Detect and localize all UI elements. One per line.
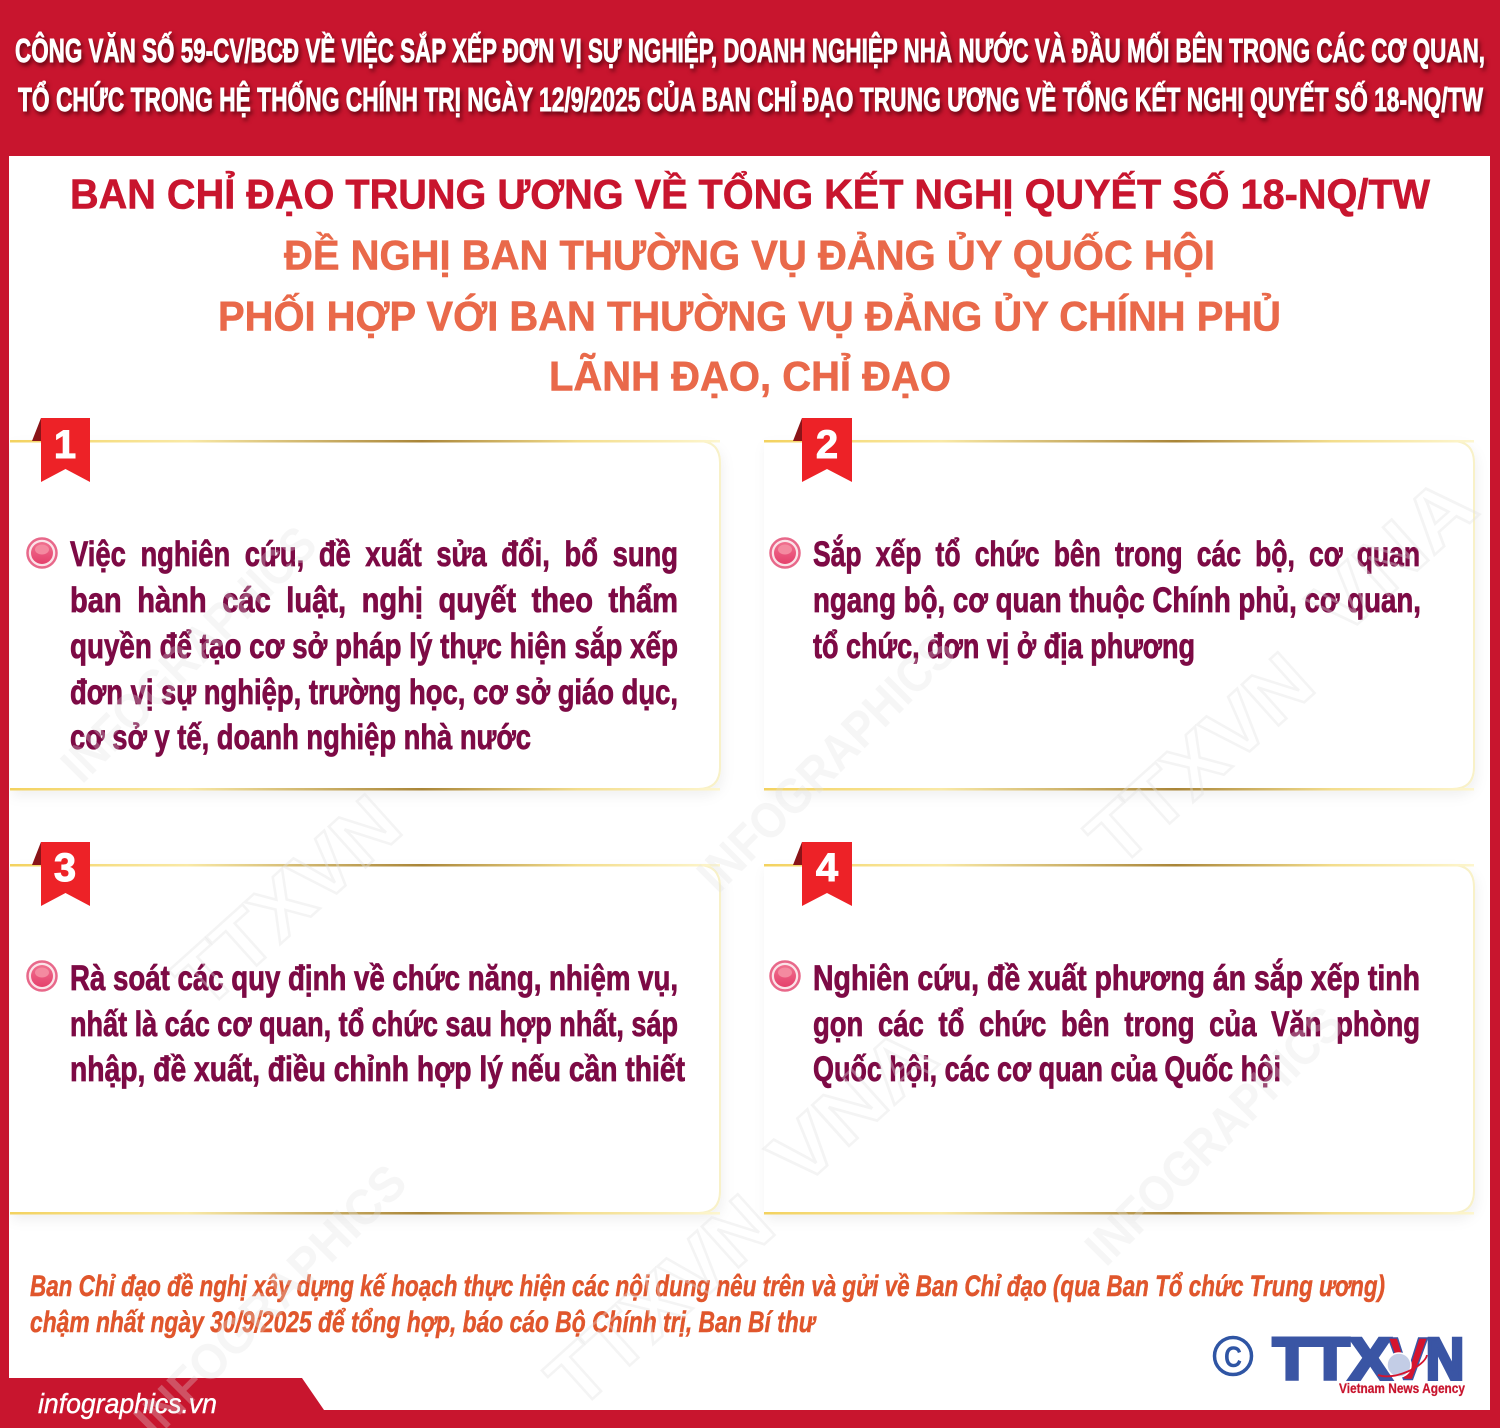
ribbon number 3: 3 bbox=[54, 846, 76, 890]
text block 3: Rà soát các quy định về chức năng, nhiệm vụ, bbox=[70, 959, 678, 998]
logo: TTXVN: TTX bbox=[1273, 1327, 1391, 1392]
watermark pattern: TTXVN bbox=[530, 1178, 790, 1425]
ribbon number 2 bbox=[793, 418, 852, 482]
watermark pattern: TTXVN bbox=[1070, 636, 1330, 883]
text block 1: cơ sở y tế, doanh nghiệp nhà nước bbox=[70, 718, 531, 757]
text block 1: ban hành các luật, nghị quyết theo thẩm bbox=[70, 581, 678, 620]
footer note: chậm nhất ngày 30/9/2025 để tổng hợp, báo cáo Bộ Chính trị, Ban Bí thư bbox=[30, 1306, 817, 1339]
header title bbox=[15, 31, 1485, 118]
main heading bbox=[70, 168, 1430, 400]
ribbon number 1 bbox=[32, 418, 90, 482]
text block 4 bbox=[813, 958, 1420, 1089]
panel 4 bbox=[764, 842, 1474, 1214]
main heading: BAN CHỈ ĐẠO TRUNG ƯƠNG VỀ TỔNG KẾT NGHỊ QUYẾT SỐ 18-NQ/TW bbox=[70, 168, 1430, 218]
panel 3 bbox=[10, 842, 720, 1214]
panel 2 bbox=[764, 418, 1474, 790]
copyright symbol: C bbox=[1224, 1341, 1242, 1374]
logo: TTXVN: N bbox=[1426, 1327, 1464, 1392]
watermark pattern: INFOGRAPHICS bbox=[1074, 996, 1354, 1276]
text block 1 bbox=[70, 535, 678, 757]
watermark pattern: VNA bbox=[1292, 459, 1493, 653]
text block 1: Việc nghiên cứu, đề xuất sửa đổi, bổ sung bbox=[70, 535, 678, 574]
text block 2: tổ chức, đơn vị ở địa phương bbox=[813, 627, 1195, 666]
site label: infographics.vn bbox=[38, 1388, 217, 1419]
main heading: ĐỀ NGHỊ BAN THƯỜNG VỤ ĐẢNG ỦY QUỐC HỘI bbox=[284, 230, 1215, 278]
text block 1: quyền để tạo cơ sở pháp lý thực hiện sắp xếp bbox=[70, 626, 678, 666]
ribbon number 4 bbox=[793, 842, 852, 906]
watermark pattern bbox=[50, 459, 1493, 1428]
text block 3 bbox=[70, 959, 685, 1089]
bullet bbox=[770, 538, 800, 568]
text block 1: đơn vị sự nghiệp, trường học, cơ sở giáo dục, bbox=[70, 673, 678, 712]
bullet bbox=[770, 962, 800, 990]
main heading: LÃNH ĐẠO, CHỈ ĐẠO bbox=[549, 352, 951, 400]
logo: TTXVN: Vietnam News Agency bbox=[1339, 1381, 1465, 1396]
ribbon number 1: 1 bbox=[54, 423, 76, 467]
logo: TTXVN: V bbox=[1388, 1326, 1428, 1392]
copyright symbol bbox=[1214, 1338, 1252, 1374]
main heading: PHỐI HỢP VỚI BAN THƯỜNG VỤ ĐẢNG ỦY CHÍNH PHỦ bbox=[218, 292, 1281, 340]
text block 3: nhất là các cơ quan, tổ chức sau hợp nhất, sáp bbox=[70, 1005, 678, 1044]
watermark pattern: TTXVN bbox=[157, 778, 417, 1025]
bullet bbox=[28, 962, 56, 990]
text block 4: Quốc hội, các cơ quan của Quốc hội bbox=[813, 1050, 1281, 1089]
text block 2 bbox=[813, 534, 1421, 666]
text block 3: nhập, đề xuất, điều chỉnh hợp lý nếu cần thiết bbox=[70, 1050, 685, 1089]
panel 1 bbox=[10, 418, 720, 790]
ribbon number 2: 2 bbox=[816, 423, 838, 467]
logo: TTXVN bbox=[1273, 1326, 1465, 1396]
ribbon number 4: 4 bbox=[816, 846, 839, 890]
bullet bbox=[28, 538, 56, 568]
watermark pattern: VNA bbox=[752, 1009, 953, 1203]
footer note bbox=[30, 1270, 1385, 1339]
watermark pattern: INFOGRAPHICS bbox=[50, 516, 327, 793]
watermark pattern: INFOGRAPHICS bbox=[686, 623, 966, 903]
ribbon number 3 bbox=[32, 842, 90, 906]
